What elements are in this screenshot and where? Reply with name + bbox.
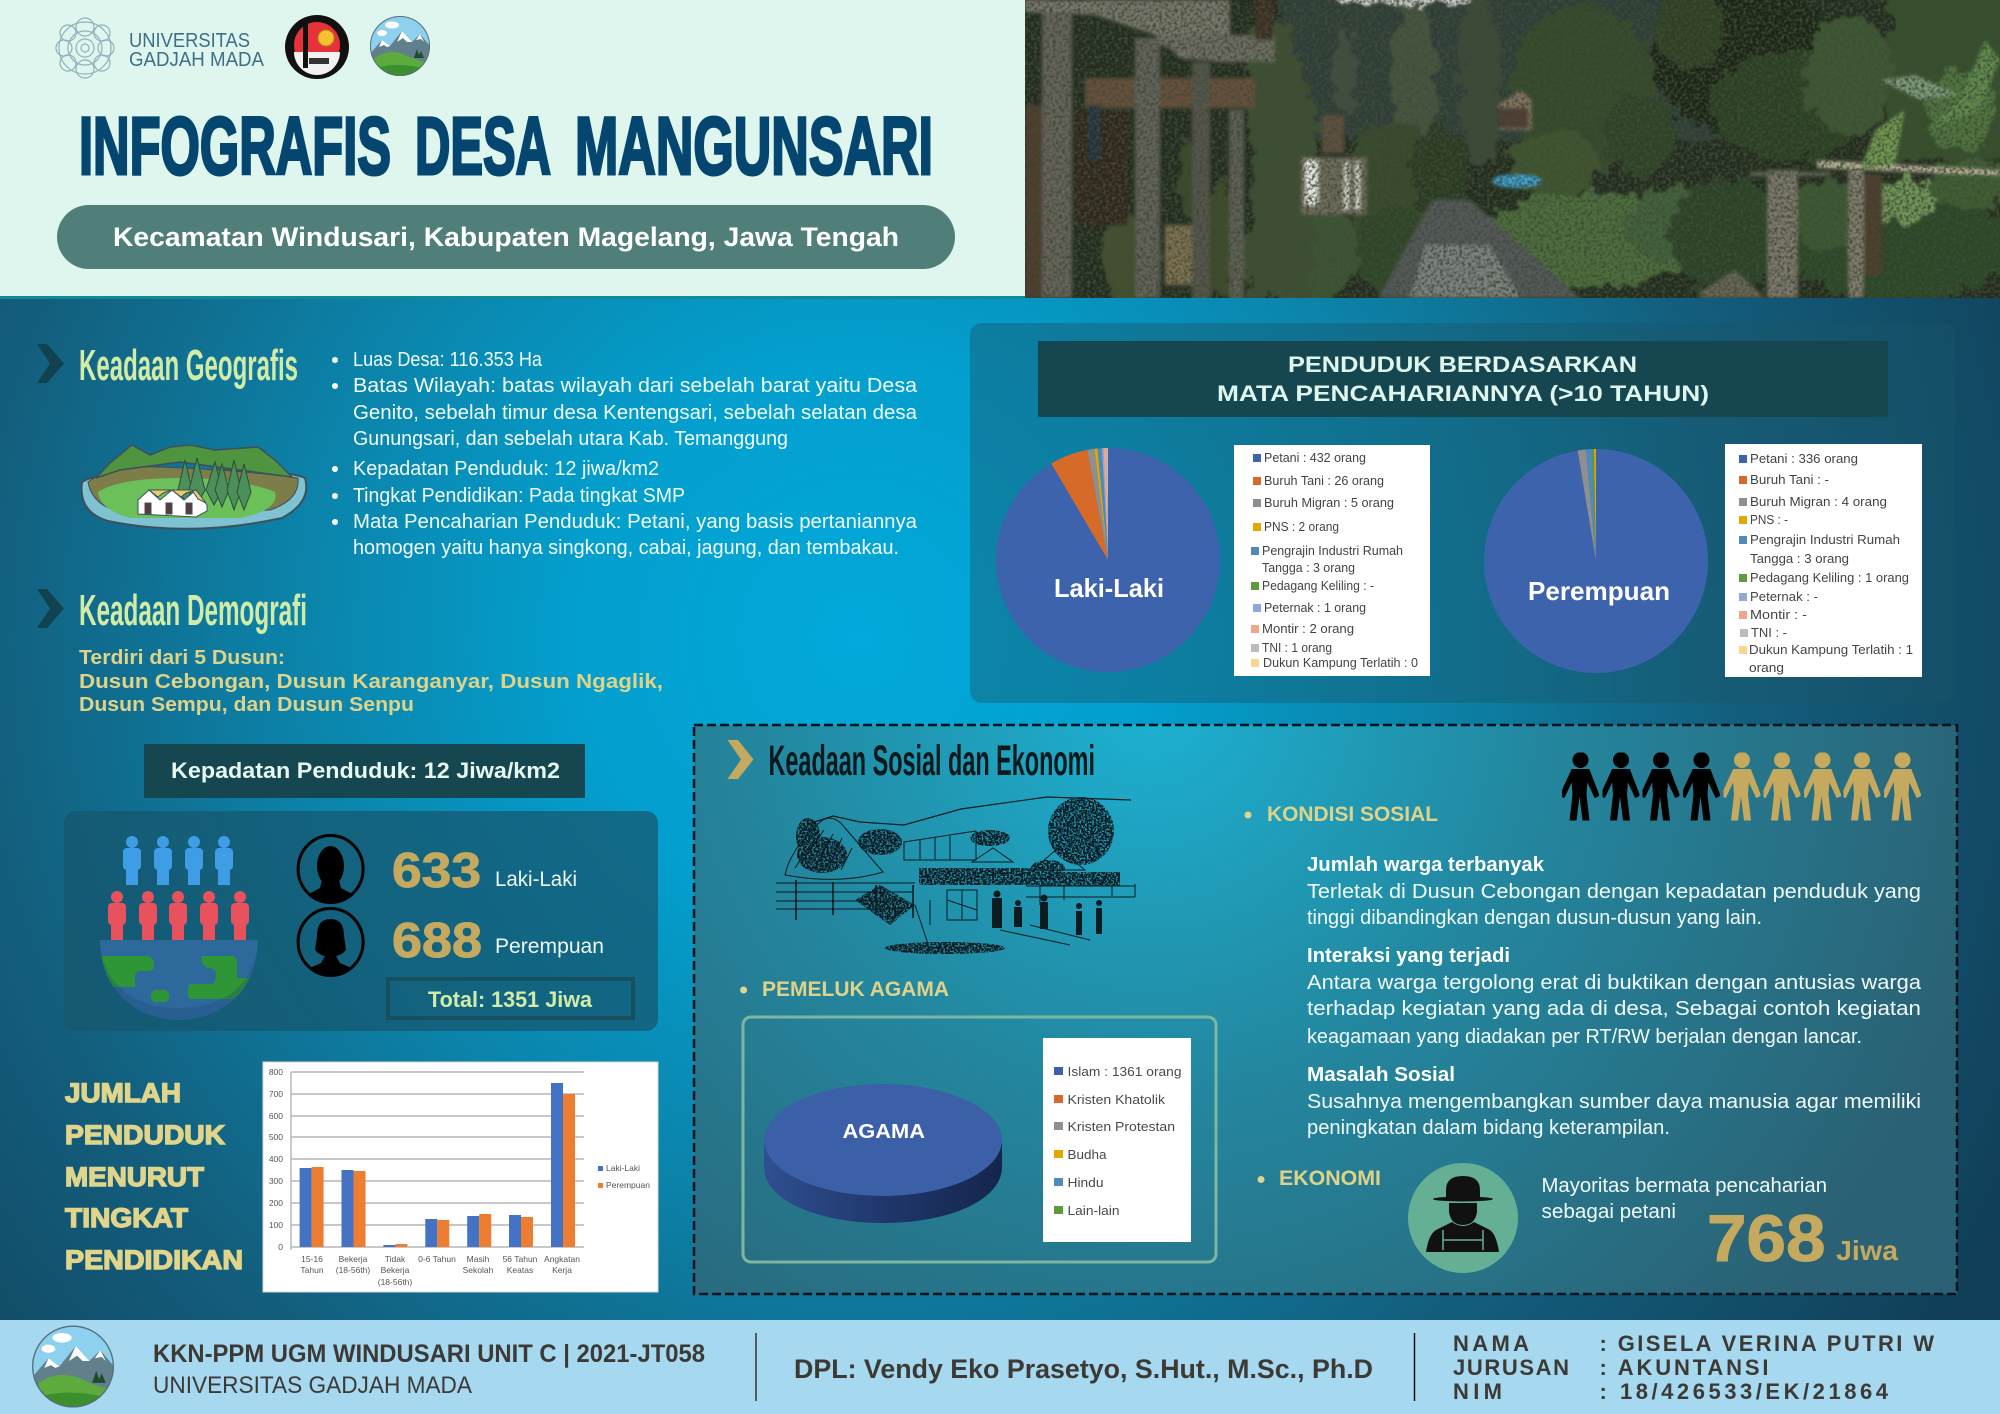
heading: keadaan sosial dan ekonomi: Keadaan Sosial dan Ekonomi [768,737,1095,785]
text: daftar dusun [79,647,663,716]
legend: perempuan: Buruh Tani : - [1750,473,1829,487]
photo: village road [1025,0,2000,305]
heading: penduduk berdasarkan mata pencaharian: MATA PENCAHARIANNYA (>10 TAHUN) [1217,381,1709,406]
text: KKN unit: KKN-PPM UGM WINDUSARI UNIT C | 2021-JT058 [153,1340,705,1368]
bar chart: education: Angkatan [544,1254,580,1264]
legend: perempuan: Peternak : - [1750,590,1818,604]
pie chart: perempuan: Perempuan [1528,576,1670,606]
bar chart: education: Tidak [385,1254,406,1264]
panel: agama [743,1017,1216,1262]
banner: kepadatan penduduk: Kepadatan Penduduk: 12 Jiwa/km2 [171,758,560,783]
heading: penduduk berdasarkan mata pencaharian: PENDUDUK BERDASARKAN [1288,352,1637,377]
text: author details: : AKUNTANSI [1600,1355,1768,1380]
bar chart: education: 56 Tahun [503,1254,538,1264]
legend: agama: Hindu [1068,1175,1104,1190]
legend: perempuan: PNS : - [1750,513,1788,527]
legend: laki-laki: Buruh Migran : 5 orang [1264,496,1394,510]
list: geographic facts: Mata Pencaharian Penduduk: Petani, yang basis pertaniannya [353,511,918,533]
logo: footer mountain [32,1326,114,1408]
pie chart: laki-laki: Laki-Laki [1054,573,1164,603]
legend: perempuan: Petani : 336 orang [1750,452,1858,466]
heading: jumlah penduduk menurut tingkat pendidikan: MENURUT [65,1162,205,1192]
stat: 633 laki-laki: Laki-Laki [495,868,577,891]
bar chart: education: 0-6 Tahun [418,1254,456,1264]
icon: female silhouette [298,908,363,978]
pie chart: laki-laki [996,448,1220,672]
bar chart: education: Sekolah [463,1265,494,1275]
legend: laki-laki: Tangga : 3 orang [1262,561,1355,575]
logo: Universitas Gadjah Mada: GADJAH MADA [129,49,265,71]
legend: perempuan: Tangga : 3 orang [1750,552,1849,566]
heading: jumlah penduduk menurut tingkat pendidikan: PENDUDUK [65,1120,226,1150]
text: kondisi sosial details: Interaksi yang terjadi [1307,945,1510,967]
icon: male silhouette [298,836,363,905]
illustration: island village [82,445,306,529]
text: mayoritas petani: sebagai petani [1542,1201,1676,1223]
logo: mountain [370,16,430,76]
list: geographic facts [332,349,918,559]
legend: laki-laki: Dukun Kampung Terlatih : 0 [1263,656,1418,670]
stat: 768 jiwa: Jiwa [1836,1235,1898,1266]
stat: 688 perempuan: 688 [392,914,482,968]
bar chart: education: 15-16 [301,1254,323,1264]
legend: perempuan: orang [1749,661,1784,675]
legend: laki-laki: Buruh Tani : 26 orang [1264,474,1384,488]
chart: 3d pie agama [764,1084,1002,1223]
title: INFOGRAFIS [79,101,391,192]
text: author details: JURUSAN [1453,1355,1569,1380]
list: geographic facts: Genito, sebelah timur desa Kentengsari, sebelah selatan desa [353,402,918,424]
legend: laki-laki: Petani : 432 orang [1264,451,1366,465]
icon: people on globe [100,836,258,1020]
heading: pemeluk agama: PEMELUK AGAMA [762,978,949,1001]
logo: Universitas Gadjah Mada: UNIVERSITAS [129,30,250,52]
title: DESA [415,101,551,192]
text: kondisi sosial details [1307,854,1922,1139]
illustration: village sketch [776,797,1135,954]
bar chart: education: 500 [269,1132,283,1142]
text: daftar dusun: Terdiri dari 5 Dusun: [79,647,285,669]
icon: gold chevron [728,740,754,779]
title [79,101,933,192]
heading: ekonomi: EKONOMI [1279,1167,1381,1190]
bar chart: education: 100 [269,1220,283,1230]
total box [388,979,633,1018]
panel: keadaan sosial dan ekonomi [694,725,1957,1294]
header panel [0,0,1025,299]
stat: 688 perempuan [392,914,604,968]
legend: laki-laki [1234,445,1430,676]
bar chart: education: 0 [278,1242,283,1252]
panel: population [64,811,658,1031]
section: Keadaan Geografis [37,341,918,559]
bar chart: education: Laki-Laki [606,1163,640,1173]
text: kondisi sosial details: Masalah Sosial [1307,1064,1455,1086]
bar chart: education: 400 [269,1154,283,1164]
bar chart: education: Kerja [552,1265,572,1275]
text: KKN unit [153,1340,705,1399]
bar chart: education: (18-56th) [336,1265,370,1275]
legend: perempuan: Montir : - [1750,608,1807,622]
legend: perempuan [1725,444,1922,677]
stat: 688 perempuan: Perempuan [495,935,604,958]
legend: laki-laki: Peternak : 1 orang [1264,601,1366,615]
stat: 633 laki-laki: 633 [392,844,481,898]
text: author details: : GISELA VERINA PUTRI W [1600,1331,1934,1356]
legend: perempuan: Buruh Migran : 4 orang [1750,495,1887,509]
list: geographic facts: homogen yaitu hanya singkong, cabai, jagung, dan tembakau. [353,537,899,559]
panel: mata pencaharian [970,323,1955,703]
banner: kepadatan penduduk [144,744,585,798]
bar chart: education: Masih [467,1254,490,1264]
text: kondisi sosial details: Terletak di Dusun Cebongan dengan kepadatan penduduk yang [1307,881,1921,903]
heading: jumlah penduduk menurut tingkat pendidikan [65,1078,243,1275]
text: kondisi sosial details: tinggi dibandingkan dengan dusun-dusun yang lain. [1307,907,1762,929]
bar chart: education: 800 [269,1067,283,1077]
text: kondisi sosial details: Jumlah warga terbanyak [1307,854,1545,876]
subtitle pill: Kecamatan Windusari, Kabupaten Magelang, Jawa Tengah [113,222,899,252]
subtitle pill [57,205,955,269]
heading: penduduk berdasarkan mata pencaharian [1038,341,1888,417]
heading: jumlah penduduk menurut tingkat pendidikan: PENDIDIKAN [65,1245,243,1275]
legend: agama: Islam : 1361 orang [1068,1064,1182,1079]
legend: perempuan: Pedagang Keliling : 1 orang [1750,571,1909,585]
pie chart: perempuan [1484,449,1708,673]
text: author details: NIM [1453,1379,1502,1404]
bar chart: education [263,1062,658,1292]
list: geographic facts: Kepadatan Penduduk: 12 jiwa/km2 [353,458,659,480]
bar chart: education: 600 [269,1111,283,1121]
stat: 768 jiwa [1707,1201,1898,1275]
bar chart: education: (18-56th) [378,1277,412,1287]
heading: jumlah penduduk menurut tingkat pendidikan: TINGKAT [65,1203,189,1233]
text: kondisi sosial details: Susahnya mengembangkan sumber daya manusia agar memiliki [1307,1091,1921,1113]
list: geographic facts: Luas Desa: 116.353 Ha [353,349,543,371]
text: kondisi sosial details: peningkatan dalam bidang keterampilan. [1307,1117,1670,1139]
bar chart: education: Tahun [300,1265,324,1275]
text: daftar dusun: Dusun Sempu, dan Dusun Senpu [79,694,414,716]
legend: laki-laki: Montir : 2 orang [1262,622,1354,636]
icon: row of people [1560,752,1921,820]
text: author details: : 18/426533/EK/21864 [1600,1379,1889,1404]
bar chart: education: Bekerja [339,1254,368,1264]
legend: agama: Budha [1068,1147,1107,1162]
icon: chevron [37,589,64,628]
list: geographic facts: Batas Wilayah: batas wilayah dari sebelah barat yaitu Desa [353,375,918,397]
section: Keadaan Demografi [37,586,663,716]
bar chart: education: Bekerja [381,1265,410,1275]
text: daftar dusun: Dusun Cebongan, Dusun Karanganyar, Dusun Ngaglik, [79,671,663,693]
text: mayoritas petani: Mayoritas bermata pencaharian [1542,1175,1827,1197]
stat: 633 laki-laki [392,844,577,898]
list: geographic facts: Tingkat Pendidikan: Pada tingkat SMP [353,485,685,507]
heading: Keadaan Demografi: Keadaan Demografi [79,586,307,635]
bar chart: education: 700 [269,1089,283,1099]
footer [0,1320,2000,1414]
text: KKN unit: UNIVERSITAS GADJAH MADA [153,1372,472,1399]
bar chart: education: 200 [269,1198,283,1208]
logo: KKN badge [285,15,349,79]
legend: laki-laki: Pengrajin Industri Rumah [1262,544,1403,558]
legend: agama [1043,1038,1191,1242]
icon: farmer [1408,1163,1518,1273]
heading: jumlah penduduk menurut tingkat pendidikan: JUMLAH [65,1078,181,1108]
legend: agama: Lain-lain [1068,1203,1120,1218]
legend: laki-laki: Pedagang Keliling : - [1262,579,1374,593]
bar chart: education: 300 [269,1176,283,1186]
heading: Keadaan Geografis: Keadaan Geografis [79,341,298,390]
legend: laki-laki: PNS : 2 orang [1264,520,1339,534]
legend: laki-laki: TNI : 1 orang [1262,641,1332,655]
legend: perempuan: Pengrajin Industri Rumah [1750,533,1900,547]
text: mayoritas petani [1542,1175,1827,1223]
text: DPL: DPL: Vendy Eko Prasetyo, S.Hut., M.Sc., Ph.D [794,1354,1373,1384]
legend: perempuan: Dukun Kampung Terlatih : 1 [1749,643,1913,657]
title: MANGUNSARI [575,101,933,192]
legend: agama: Kristen Khatolik [1068,1092,1166,1107]
heading: kondisi sosial: KONDISI SOSIAL [1267,803,1438,826]
text: author details: NAMA [1453,1331,1529,1356]
bar chart: education: Keatas [507,1265,533,1275]
text: kondisi sosial details: keagamaan yang diadakan per RT/RW berjalan dengan lancar. [1307,1026,1862,1048]
bar chart: education: Perempuan [606,1180,650,1190]
chart: 3d pie agama: AGAMA [842,1121,925,1143]
text: kondisi sosial details: Antara warga tergolong erat di buktikan dengan antusias warga [1307,972,1922,994]
stat: 768 jiwa: 768 [1707,1201,1826,1275]
legend: perempuan: TNI : - [1751,626,1787,640]
total box: Total: 1351 Jiwa [428,987,593,1012]
icon: chevron [37,344,64,383]
text: kondisi sosial details: terhadap kegiatan yang ada di desa, Sebagai contoh kegiatan [1307,998,1921,1020]
logo: Universitas Gadjah Mada [56,18,265,78]
text: author details [1453,1331,1934,1404]
legend: agama: Kristen Protestan [1068,1119,1175,1134]
list: geographic facts: Gunungsari, dan sebelah utara Kab. Temanggung [353,428,788,450]
